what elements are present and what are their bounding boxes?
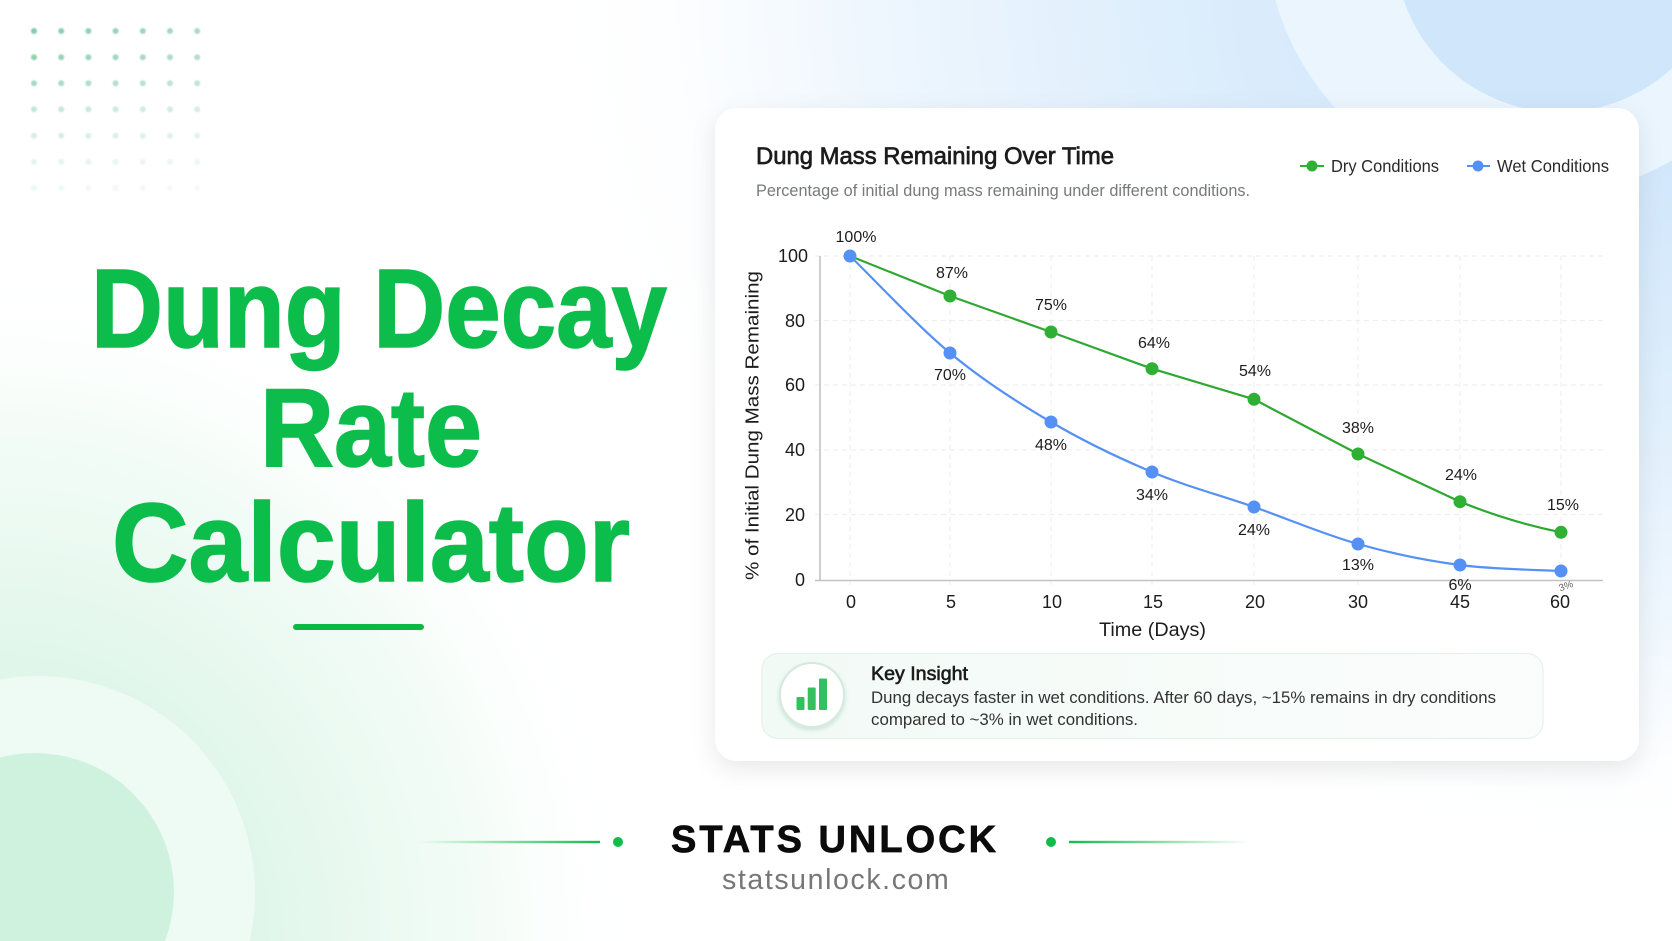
data labels: dry: 87% <box>936 265 968 282</box>
chart title: Dung Mass Remaining Over Time <box>756 143 1114 170</box>
x axis title: Time (Days) <box>1099 620 1206 641</box>
data labels: wet: 34% <box>1136 487 1168 504</box>
insight heading: Key Insight <box>871 664 969 685</box>
insight text <box>871 688 1496 729</box>
data labels: dry: 54% <box>1239 363 1271 380</box>
legend: Wet Conditions <box>1497 156 1609 176</box>
brand name: STATS UNLOCK <box>671 819 999 861</box>
x axis labels: 5 <box>946 592 956 612</box>
y axis labels: 0 <box>795 570 805 590</box>
y axis labels <box>778 246 808 590</box>
data labels: wet: 24% <box>1238 522 1270 539</box>
title: Calculator <box>112 481 630 605</box>
axes <box>815 256 1603 580</box>
series: dry conditions <box>850 256 1568 539</box>
legend <box>1300 156 1609 176</box>
title: Rate <box>260 366 482 490</box>
data labels: dry: 15% <box>1547 497 1579 514</box>
data labels: wet: 13% <box>1342 557 1374 574</box>
x axis labels: 15 <box>1143 592 1163 612</box>
insight text: compared to ~3% in wet conditions. <box>871 710 1138 729</box>
data labels: dry: 75% <box>1035 297 1067 314</box>
background: blue corner wash <box>530 0 1672 870</box>
data labels: dry: 38% <box>1342 420 1374 437</box>
brand url: statsunlock.com <box>722 864 950 896</box>
line chart <box>742 229 1603 641</box>
x axis labels: 10 <box>1042 592 1062 612</box>
x axis labels: 0 <box>846 592 856 612</box>
data labels: dry: 64% <box>1138 335 1170 352</box>
y axis labels: 40 <box>785 440 805 460</box>
y axis labels: 20 <box>785 505 805 525</box>
x axis labels: 60 <box>1550 592 1570 612</box>
title <box>91 247 667 605</box>
insight text: Dung decays faster in wet conditions. After 60 days, ~15% remains in dry conditions <box>871 688 1496 707</box>
decorative circles: top right <box>1275 0 1672 197</box>
y axis labels: 60 <box>785 375 805 395</box>
background: green corner wash <box>0 240 660 941</box>
x axis labels: 45 <box>1450 592 1470 612</box>
callout: key insight <box>762 654 1543 738</box>
chart subtitle: Percentage of initial dung mass remaining under different conditions. <box>756 181 1250 200</box>
x axis labels: 20 <box>1245 592 1265 612</box>
series: wet conditions <box>844 250 1568 578</box>
title underline <box>293 624 424 630</box>
title: Dung Decay <box>91 247 667 371</box>
data labels: dry <box>836 229 1579 514</box>
data labels: dry: 100% <box>836 229 876 246</box>
y axis labels: 80 <box>785 311 805 331</box>
data labels: dry: 24% <box>1445 467 1477 484</box>
icon: bar chart in circle <box>780 663 844 727</box>
y axis labels: 100 <box>778 246 808 266</box>
data labels: wet: 48% <box>1035 437 1067 454</box>
data labels: wet <box>934 367 1575 594</box>
data labels: wet: 3% <box>1557 579 1575 594</box>
gridlines <box>815 256 1603 586</box>
footer brand <box>419 819 1250 896</box>
x axis labels: 30 <box>1348 592 1368 612</box>
x axis labels <box>846 592 1570 612</box>
data labels: wet: 6% <box>1448 577 1472 594</box>
y axis title: % of Initial Dung Mass Remaining <box>742 271 762 580</box>
footer left rule <box>419 841 600 843</box>
data labels: wet: 70% <box>934 367 966 384</box>
legend: Dry Conditions <box>1331 156 1439 176</box>
panel: chart card <box>715 108 1639 761</box>
footer right rule <box>1046 837 1056 847</box>
decorative dot grid <box>34 31 200 188</box>
decorative circles: bottom left <box>0 676 255 941</box>
